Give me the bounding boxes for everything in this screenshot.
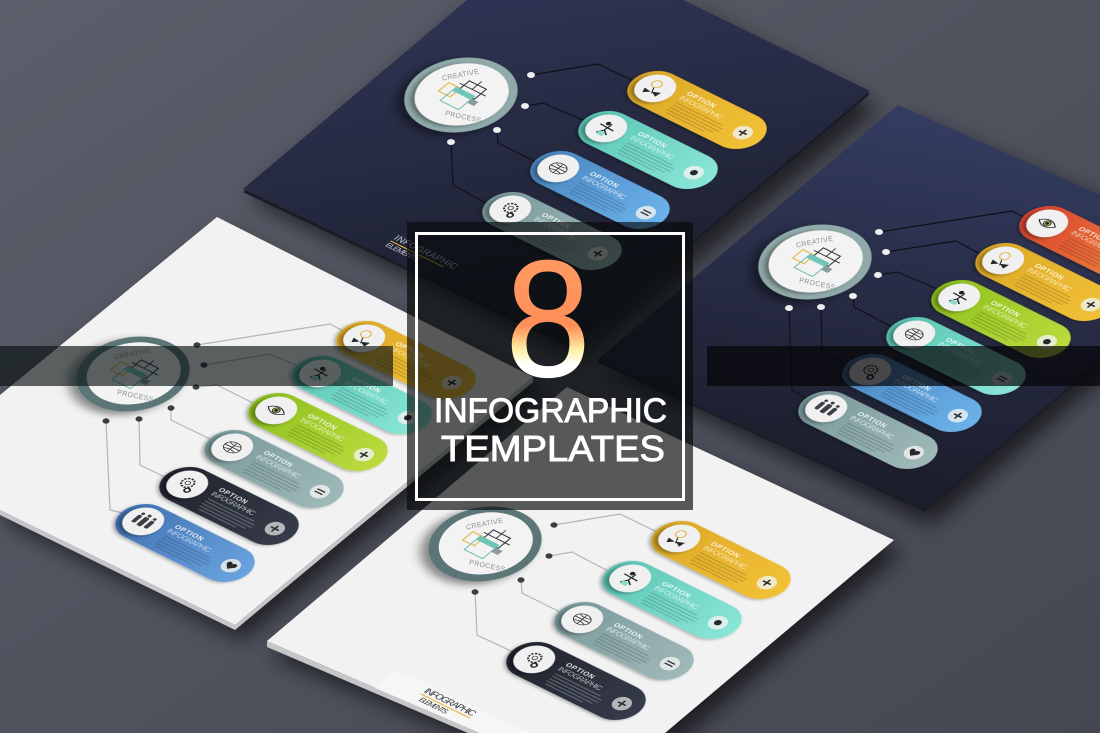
band: left dark overlay	[0, 346, 393, 386]
pill: blue option: OPTION	[899, 373, 933, 392]
pill: dark option: OPTION	[563, 661, 597, 680]
pill: blue option: OPTION	[172, 523, 206, 542]
main circle: creative process, left white: CREATIVE	[114, 347, 152, 362]
pill: yellow option: INFOGRAPHIC	[1025, 266, 1074, 293]
pill: teal option: INFOGRAPHIC	[652, 584, 701, 611]
pill: teal option: OPTION	[659, 580, 693, 599]
connector lines: right dark	[789, 211, 1030, 400]
main circle: creative process, right dark: PROCESS	[798, 277, 836, 292]
pill: teal option	[281, 349, 443, 441]
main circle: creative process, bottom white	[405, 492, 565, 596]
pill: teal option	[567, 104, 729, 196]
pill: blue option: INFOGRAPHIC	[580, 174, 629, 201]
pill: teal option	[591, 554, 753, 646]
pill: dark option: OPTION	[216, 486, 250, 505]
pill: teal option: INFOGRAPHIC	[342, 379, 391, 406]
pill: blue option	[831, 347, 993, 439]
brand label: top dark: ELEMENTS	[383, 241, 423, 263]
pill: teal option: INFOGRAPHIC	[936, 340, 985, 367]
pill: yellow option	[616, 64, 778, 156]
title frame	[416, 234, 684, 500]
brand label: top dark: INFOGRAPHIC	[391, 234, 461, 271]
pill: yellow option	[640, 514, 802, 606]
pill: blue option: INFOGRAPHIC	[892, 377, 941, 404]
pill: grey option: INFOGRAPHIC	[532, 215, 581, 242]
pill: yellow option: INFOGRAPHIC	[386, 344, 435, 371]
brand label: bottom white: ELEMENTS	[417, 696, 451, 715]
pill: green option: INFOGRAPHIC	[981, 303, 1030, 330]
pill: grey option: OPTION	[539, 211, 573, 230]
connector dots: right dark	[785, 229, 890, 311]
pill: teal option: INFOGRAPHIC	[628, 134, 677, 161]
main circle: creative process, top dark	[381, 43, 541, 147]
pill: yellow option: OPTION	[1032, 262, 1066, 281]
main circle: creative process, bottom white: CREATIVE	[466, 517, 504, 532]
panel: right dark template	[597, 105, 1100, 512]
main circle: creative process, bottom white: PROCESS	[468, 559, 506, 574]
connector lines: left white	[106, 324, 345, 513]
main circle: creative process, left white: PROCESS	[116, 389, 154, 404]
pill: blue option: OPTION	[587, 170, 621, 189]
title numeral 8: 8	[506, 226, 590, 411]
pill: red option	[1008, 199, 1100, 291]
pill: grey option: INFOGRAPHIC	[604, 625, 653, 652]
pill: grey option	[193, 423, 355, 515]
pill: green option: INFOGRAPHIC	[298, 416, 347, 443]
pill: green option	[920, 273, 1082, 365]
pill: yellow option: OPTION	[393, 340, 427, 359]
pill: dark option	[148, 460, 310, 552]
pill: teal option	[875, 310, 1037, 402]
title box: dark overlay	[407, 222, 693, 510]
pill: dark option: INFOGRAPHIC	[209, 490, 258, 517]
pill: blue option	[104, 497, 266, 589]
connector dots: left white	[102, 342, 208, 424]
pill: dark option: INFOGRAPHIC	[556, 665, 605, 692]
pill: green option	[237, 386, 399, 478]
title: infographic templates	[434, 392, 667, 469]
pill: yellow option: INFOGRAPHIC	[701, 544, 750, 571]
pill: blue option: INFOGRAPHIC	[165, 527, 214, 554]
pill: grey option	[787, 384, 949, 476]
band: right dark overlay	[707, 346, 1100, 386]
pill: blue option	[519, 144, 681, 236]
title: infographic templates: INFOGRAPHIC	[434, 392, 667, 430]
pill: grey option	[543, 595, 705, 687]
pill: grey option: OPTION	[261, 449, 295, 468]
pill: green option: OPTION	[305, 412, 339, 431]
pill: teal option: OPTION	[635, 130, 669, 149]
pill: grey option: INFOGRAPHIC	[848, 414, 897, 441]
main circle: creative process, top dark: PROCESS	[444, 110, 482, 125]
panel: bottom white template	[267, 387, 894, 733]
panel: left white template	[0, 217, 533, 630]
pill: yellow option	[964, 236, 1100, 328]
main circle: creative process, top dark: CREATIVE	[442, 68, 480, 83]
connector lines: top dark	[451, 64, 640, 207]
pill: grey option: OPTION	[855, 410, 889, 429]
pill: yellow option: OPTION	[684, 90, 718, 109]
panel: top dark template	[243, 0, 870, 348]
pill: grey option: INFOGRAPHIC	[254, 453, 303, 480]
main circle: creative process, right dark: CREATIVE	[796, 235, 834, 250]
main circle: creative process, right dark	[735, 210, 895, 314]
pill: dark option	[495, 635, 657, 727]
connector dots: bottom white	[472, 522, 558, 595]
pill: green option: OPTION	[988, 299, 1022, 318]
connector dots: top dark	[447, 72, 535, 145]
title: infographic templates: TEMPLATES	[441, 428, 665, 469]
main circle: creative process, left white	[53, 322, 213, 426]
connector lines: bottom white	[475, 514, 657, 652]
pill: yellow option	[325, 314, 487, 406]
pill: grey option: OPTION	[611, 621, 645, 640]
pill: yellow option: INFOGRAPHIC	[677, 94, 726, 121]
pill: yellow option: OPTION	[708, 540, 742, 559]
pill: teal option: OPTION	[943, 336, 977, 355]
pill: grey option	[471, 185, 633, 277]
pill: teal option: OPTION	[349, 375, 383, 394]
brand label: bottom white: INFOGRAPHIC	[421, 687, 479, 718]
